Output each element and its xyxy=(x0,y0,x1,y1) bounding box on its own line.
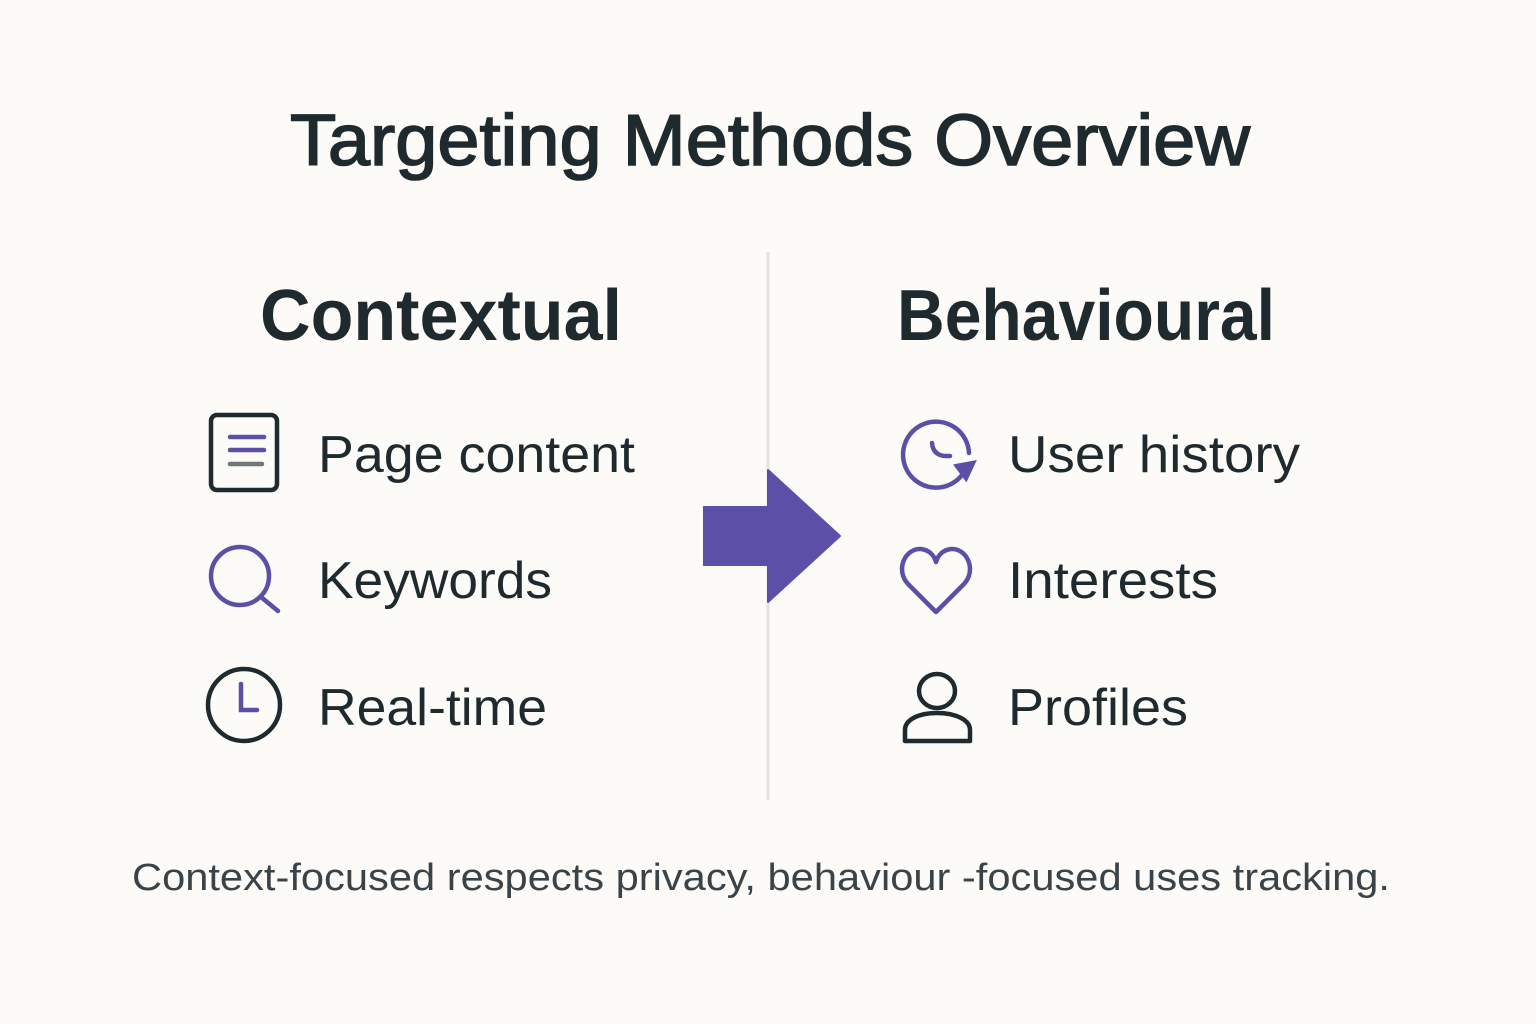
title: Targeting Methods Overview xyxy=(290,101,1251,181)
item: real-time: Real-time xyxy=(318,679,547,737)
icon: history xyxy=(903,422,973,488)
icon: heart xyxy=(902,549,970,612)
heading: contextual: Contextual xyxy=(260,276,622,356)
heading: behavioural: Behavioural xyxy=(897,276,1275,356)
item: page content: Page content xyxy=(318,426,636,484)
footer caption: Context-focused respects privacy, behaviour -focused uses tracking. xyxy=(132,857,1390,899)
arrow xyxy=(703,470,840,602)
item: user history: User history xyxy=(1008,426,1300,484)
item: keywords: Keywords xyxy=(318,552,552,610)
icon: clock xyxy=(208,669,280,741)
item: interests: Interests xyxy=(1008,552,1218,610)
panel: contextual xyxy=(208,276,636,741)
icon: search xyxy=(211,547,278,611)
icon: person xyxy=(905,674,970,741)
panel: behavioural xyxy=(897,276,1300,741)
item: profiles: Profiles xyxy=(1008,679,1188,737)
icon: document xyxy=(211,415,277,490)
